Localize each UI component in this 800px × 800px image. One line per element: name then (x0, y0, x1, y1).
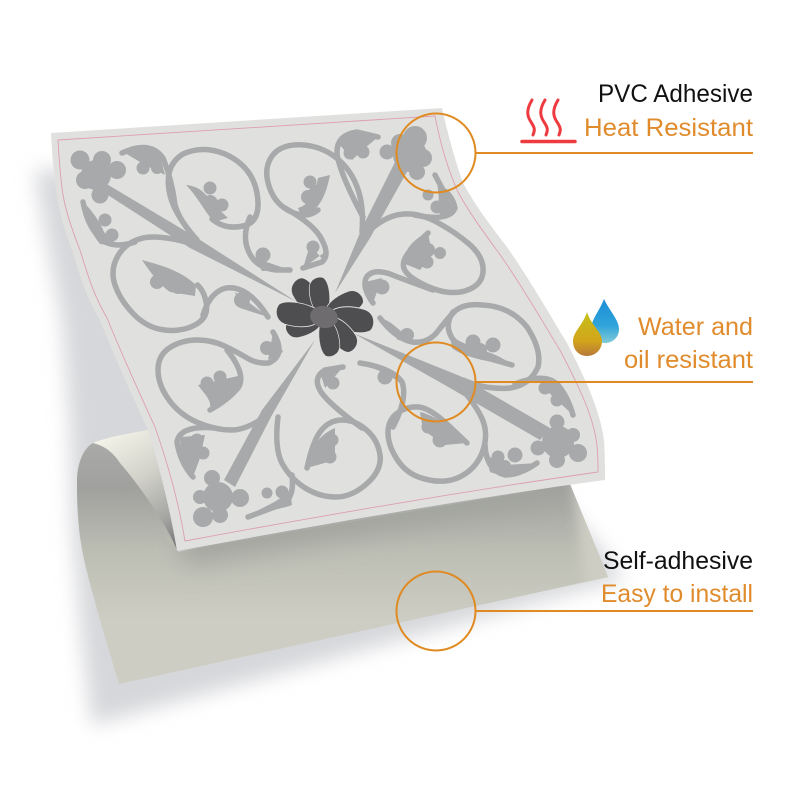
rolled backing flap (93, 430, 178, 552)
infographic (30, 84, 753, 729)
text: Easy to install: Easy to install (601, 580, 753, 608)
top-right corner cluster (335, 126, 432, 293)
bottom-left corner cluster (193, 340, 315, 527)
icon: water and oil drops (573, 299, 619, 356)
icon: heat (522, 100, 575, 142)
faded right edge of backing (568, 485, 608, 580)
leaves (83, 134, 573, 517)
text: Heat Resistant: Heat Resistant (584, 114, 753, 142)
callout: water and oil resistant (396, 299, 753, 422)
centre flower (274, 274, 376, 358)
text: PVC Adhesive: PVC Adhesive (598, 80, 753, 108)
tile motif (70, 126, 587, 527)
callout: heat resistant (396, 80, 753, 192)
print margin line (58, 116, 598, 541)
shadow under sheet and backing (35, 170, 625, 725)
text: Self-adhesive: Self-adhesive (603, 547, 753, 575)
text: oil resistant: oil resistant (624, 346, 753, 374)
tile sheet (51, 108, 605, 551)
text: Water and: Water and (638, 313, 753, 341)
callout: self-adhesive (396, 547, 753, 650)
scrolls (83, 132, 573, 517)
backing sheet (77, 430, 630, 684)
shadow cast on backing (178, 488, 543, 568)
bottom-right corner cluster (353, 333, 587, 468)
top-left corner cluster (70, 150, 297, 302)
flower centre (308, 303, 340, 331)
